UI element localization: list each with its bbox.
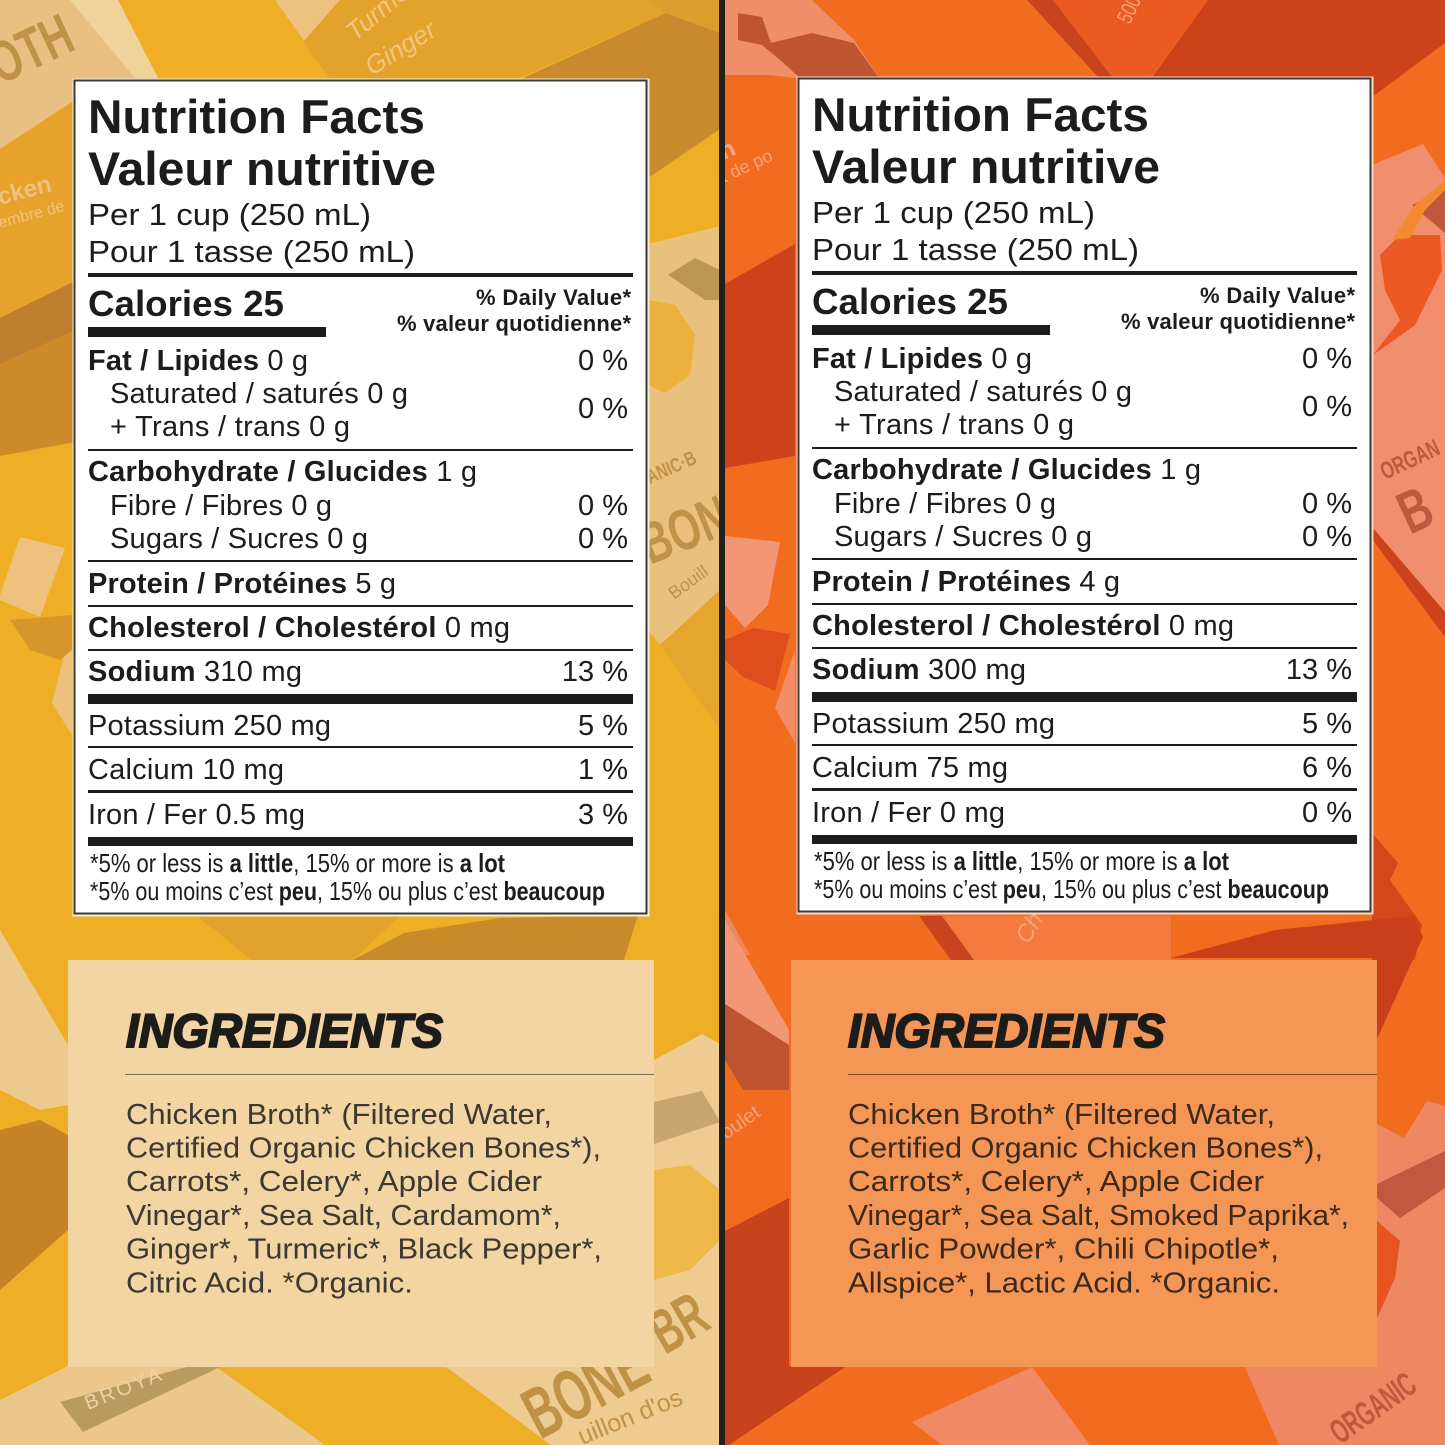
calcium row: 1 %: [578, 754, 628, 786]
calories: Calories 25: [812, 281, 1008, 322]
calcium row: [88, 754, 628, 786]
packet lettering: right background: [715, 0, 1444, 1445]
carbohydrate rows: Sugars / Sucres 0 g: [834, 521, 1092, 553]
ingredient list: Garlic Powder*, Chili Chipotle*,: [848, 1234, 1279, 1266]
iron row: 0 %: [1302, 797, 1352, 829]
potassium row: 5 %: [1302, 708, 1352, 740]
iron row: Iron / Fer 0.5 mg: [88, 799, 305, 831]
ingredient list: Carrots*, Celery*, Apple Cider: [848, 1166, 1265, 1198]
carbohydrate rows: Fibre / Fibres 0 g: [110, 490, 332, 522]
ingredient list: Citric Acid. *Organic.: [126, 1268, 413, 1300]
sodium row: 13 %: [562, 656, 628, 688]
ingredient list: Certified Organic Chicken Bones*),: [126, 1132, 601, 1164]
carbohydrate rows: Carbohydrate / Glucides 1 g: [88, 456, 477, 488]
heading: ingredients: INGREDIENTS: [848, 1004, 1165, 1057]
packet lettering: left background: BROYA: [82, 1363, 167, 1415]
heading: ingredients: INGREDIENTS: [126, 1004, 443, 1057]
panel: left turmeric background: [0, 0, 738, 1445]
protein row: Protein / Protéines 4 g: [812, 566, 1120, 598]
potassium row: 5 %: [578, 710, 628, 742]
daily value header: % Daily Value*: [476, 285, 631, 310]
heading: nutrition facts: Valeur nutritive: [88, 143, 436, 196]
heading: nutrition facts: Nutrition Facts: [812, 89, 1149, 142]
calories: [88, 283, 326, 337]
carbohydrate rows: 0 %: [1302, 488, 1352, 520]
fat rows: 0 %: [1302, 343, 1352, 375]
packet lettering: left background: BON: [630, 483, 738, 577]
heading: nutrition facts: Nutrition Facts: [88, 91, 425, 144]
daily value header: % valeur quotidienne*: [1121, 309, 1355, 334]
carbohydrate rows: 0 %: [578, 523, 628, 555]
carbohydrate rows: Carbohydrate / Glucides 1 g: [812, 454, 1201, 486]
calcium row: 6 %: [1302, 752, 1352, 784]
ingredient list: Allspice*, Lactic Acid. *Organic.: [848, 1268, 1280, 1300]
ingredient list: Chicken Broth* (Filtered Water,: [126, 1099, 552, 1131]
ingredient list: Chicken Broth* (Filtered Water,: [848, 1099, 1275, 1131]
daily value header: % Daily Value*: [1200, 283, 1355, 308]
serving size: [812, 195, 1139, 267]
fat rows: + Trans / trans 0 g: [110, 411, 350, 443]
ingredient list: Certified Organic Chicken Bones*),: [848, 1132, 1323, 1164]
packet lettering: left background: BR: [637, 1278, 720, 1366]
cholesterol row: Cholesterol / Cholestérol 0 mg: [88, 612, 510, 644]
fat rows: 0 %: [578, 345, 628, 377]
serving size: Pour 1 tasse (250 mL): [812, 232, 1139, 267]
packet lettering: right background: B: [1387, 473, 1443, 547]
carbohydrate rows: 0 %: [1302, 521, 1352, 553]
calcium row: Calcium 75 mg: [812, 752, 1008, 784]
iron row: 3 %: [578, 799, 628, 831]
iron row: [812, 797, 1352, 829]
ingredient list: [126, 1099, 602, 1300]
carbohydrate rows: [88, 456, 628, 555]
calcium row: [812, 752, 1352, 784]
heading: nutrition facts: Valeur nutritive: [812, 141, 1160, 194]
sodium row: Sodium 300 mg: [812, 654, 1026, 686]
ingredient list: Carrots*, Celery*, Apple Cider: [126, 1166, 543, 1198]
packet lettering: left background: Ginger: [359, 14, 442, 81]
calcium row: Calcium 10 mg: [88, 754, 284, 786]
iron row: Iron / Fer 0 mg: [812, 797, 1005, 829]
packet lettering: right background: n: [715, 135, 740, 165]
serving size: Per 1 cup (250 mL): [812, 195, 1095, 230]
serving size: [88, 197, 415, 269]
potassium row: Potassium 250 mg: [88, 710, 331, 742]
carbohydrate rows: [812, 454, 1352, 553]
ingredient list: Vinegar*, Sea Salt, Smoked Paprika*,: [848, 1200, 1349, 1232]
sodium row: 13 %: [1286, 654, 1352, 686]
footnote: *5% ou moins c’est peu, 15% ou plus c’est beaucoup: [90, 876, 605, 906]
potassium row: [88, 710, 628, 742]
calories: [812, 281, 1050, 335]
cholesterol row: Cholesterol / Cholestérol 0 mg: [812, 610, 1234, 642]
packet lettering: left background: [0, 0, 738, 1445]
packet lettering: right background: Ch: [1010, 908, 1049, 948]
carbohydrate rows: Fibre / Fibres 0 g: [834, 488, 1056, 520]
panel: right nutrition facts label: [796, 76, 1374, 914]
fat rows: Saturated / saturés 0 g: [834, 376, 1132, 408]
fat rows: + Trans / trans 0 g: [834, 409, 1074, 441]
protein row: Protein / Protéines 5 g: [88, 568, 396, 600]
fat rows: Saturated / saturés 0 g: [110, 378, 408, 410]
packet lettering: right background: ORGAN: [1376, 435, 1444, 485]
daily value header: % valeur quotidienne*: [397, 311, 631, 336]
panel: left nutrition facts label: [72, 78, 650, 916]
heading: nutrition facts: [812, 89, 1160, 194]
footnote: [90, 848, 605, 906]
panel: left ingredients: [68, 960, 654, 1367]
footnote: [814, 846, 1329, 904]
calories: Calories 25: [88, 283, 284, 324]
ingredient list: [848, 1099, 1349, 1300]
divider between products: [719, 0, 725, 1445]
carbohydrate rows: Sugars / Sucres 0 g: [110, 523, 368, 555]
daily value header: [397, 285, 631, 336]
fat rows: 0 %: [1302, 391, 1352, 423]
potassium row: Potassium 250 mg: [812, 708, 1055, 740]
packet lettering: left background: ANIC·B: [643, 446, 700, 488]
sodium row: [812, 654, 1352, 686]
carbohydrate rows: 0 %: [578, 490, 628, 522]
ingredient list: Vinegar*, Sea Salt, Cardamom*,: [126, 1200, 561, 1232]
packet lettering: left background: Bouill: [665, 561, 712, 603]
ingredient list: Ginger*, Turmeric*, Black Pepper*,: [126, 1234, 602, 1266]
packet lettering: right background: t de po: [717, 145, 776, 187]
fat rows: [88, 345, 628, 443]
fat rows: [812, 343, 1352, 441]
fat rows: Fat / Lipides 0 g: [88, 345, 308, 377]
potassium row: [812, 708, 1352, 740]
heading: nutrition facts: [88, 91, 436, 196]
packet lettering: right background: oulet: [716, 1101, 765, 1144]
sodium row: [88, 656, 628, 688]
fat rows: 0 %: [578, 393, 628, 425]
panel: right ingredients: [791, 960, 1377, 1367]
fat rows: Fat / Lipides 0 g: [812, 343, 1032, 375]
panel: right chili background: [715, 0, 1445, 1445]
serving size: Pour 1 tasse (250 mL): [88, 234, 415, 269]
footnote: *5% or less is a little, 15% or more is a lot: [814, 846, 1229, 876]
daily value header: [1121, 283, 1355, 334]
serving size: Per 1 cup (250 mL): [88, 197, 371, 232]
footnote: *5% ou moins c’est peu, 15% ou plus c’est beaucoup: [814, 874, 1329, 904]
sodium row: Sodium 310 mg: [88, 656, 302, 688]
iron row: [88, 799, 628, 831]
footnote: *5% or less is a little, 15% or more is a lot: [90, 848, 505, 878]
